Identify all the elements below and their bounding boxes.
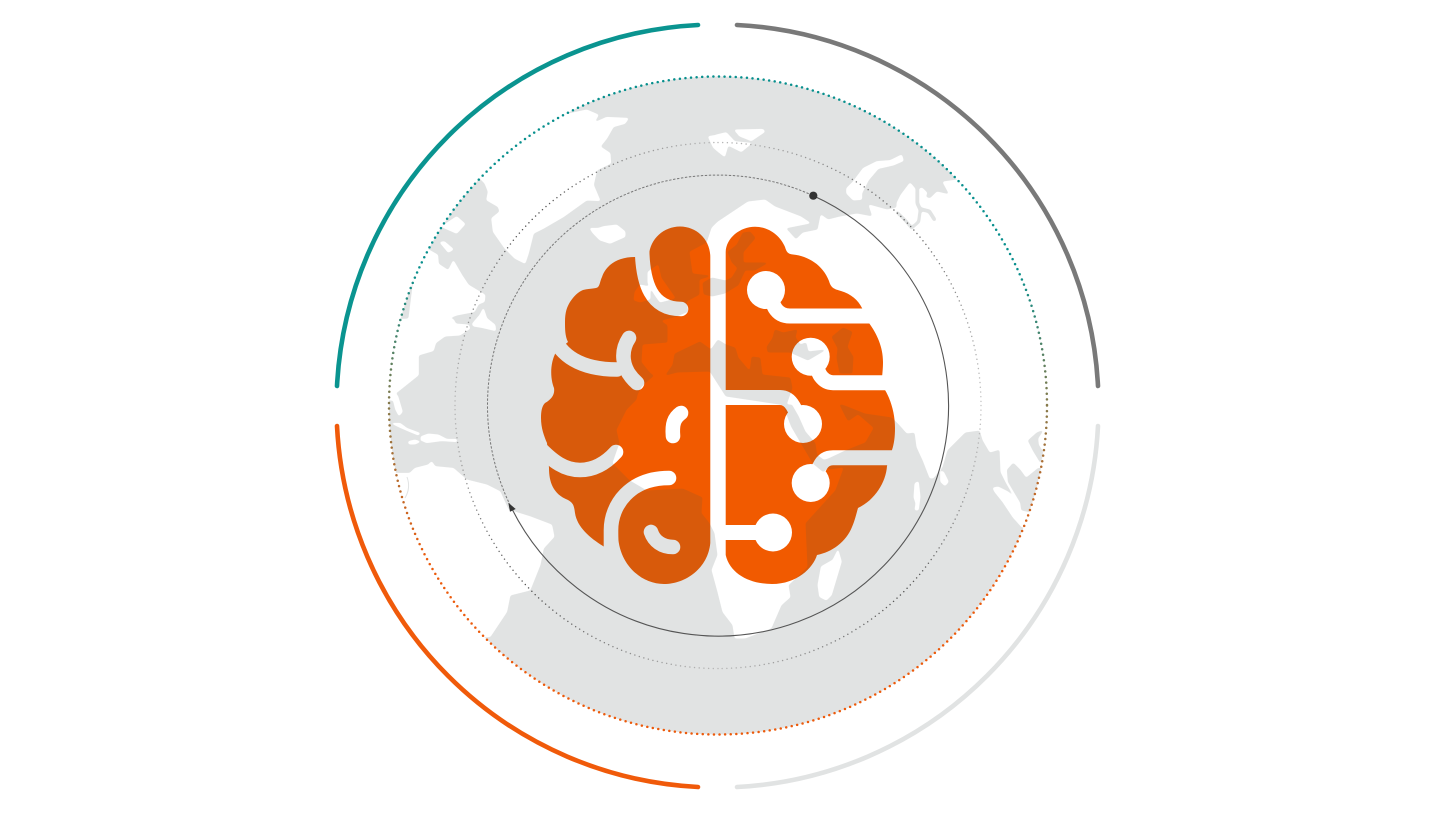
- solid inner ring progress arc: [512, 196, 948, 636]
- brain: left hemisphere: [541, 226, 710, 584]
- dashed inner ring segment: [487, 175, 813, 509]
- brain: right hemisphere with circuit traces: [726, 226, 895, 584]
- outer ring: light grey arc: [737, 426, 1098, 787]
- outer ring: teal arc: [337, 25, 698, 386]
- dotted middle ring: [455, 142, 981, 668]
- dotted globe outline: [389, 76, 1047, 734]
- infographic: brain over world map inside concentric rings: [334, 22, 1100, 790]
- arc arrowhead: [508, 503, 516, 512]
- outer ring: grey arc: [737, 25, 1098, 386]
- outer ring: orange arc: [337, 426, 698, 787]
- arc start dot: [809, 192, 817, 200]
- world map globe: [380, 70, 1060, 750]
